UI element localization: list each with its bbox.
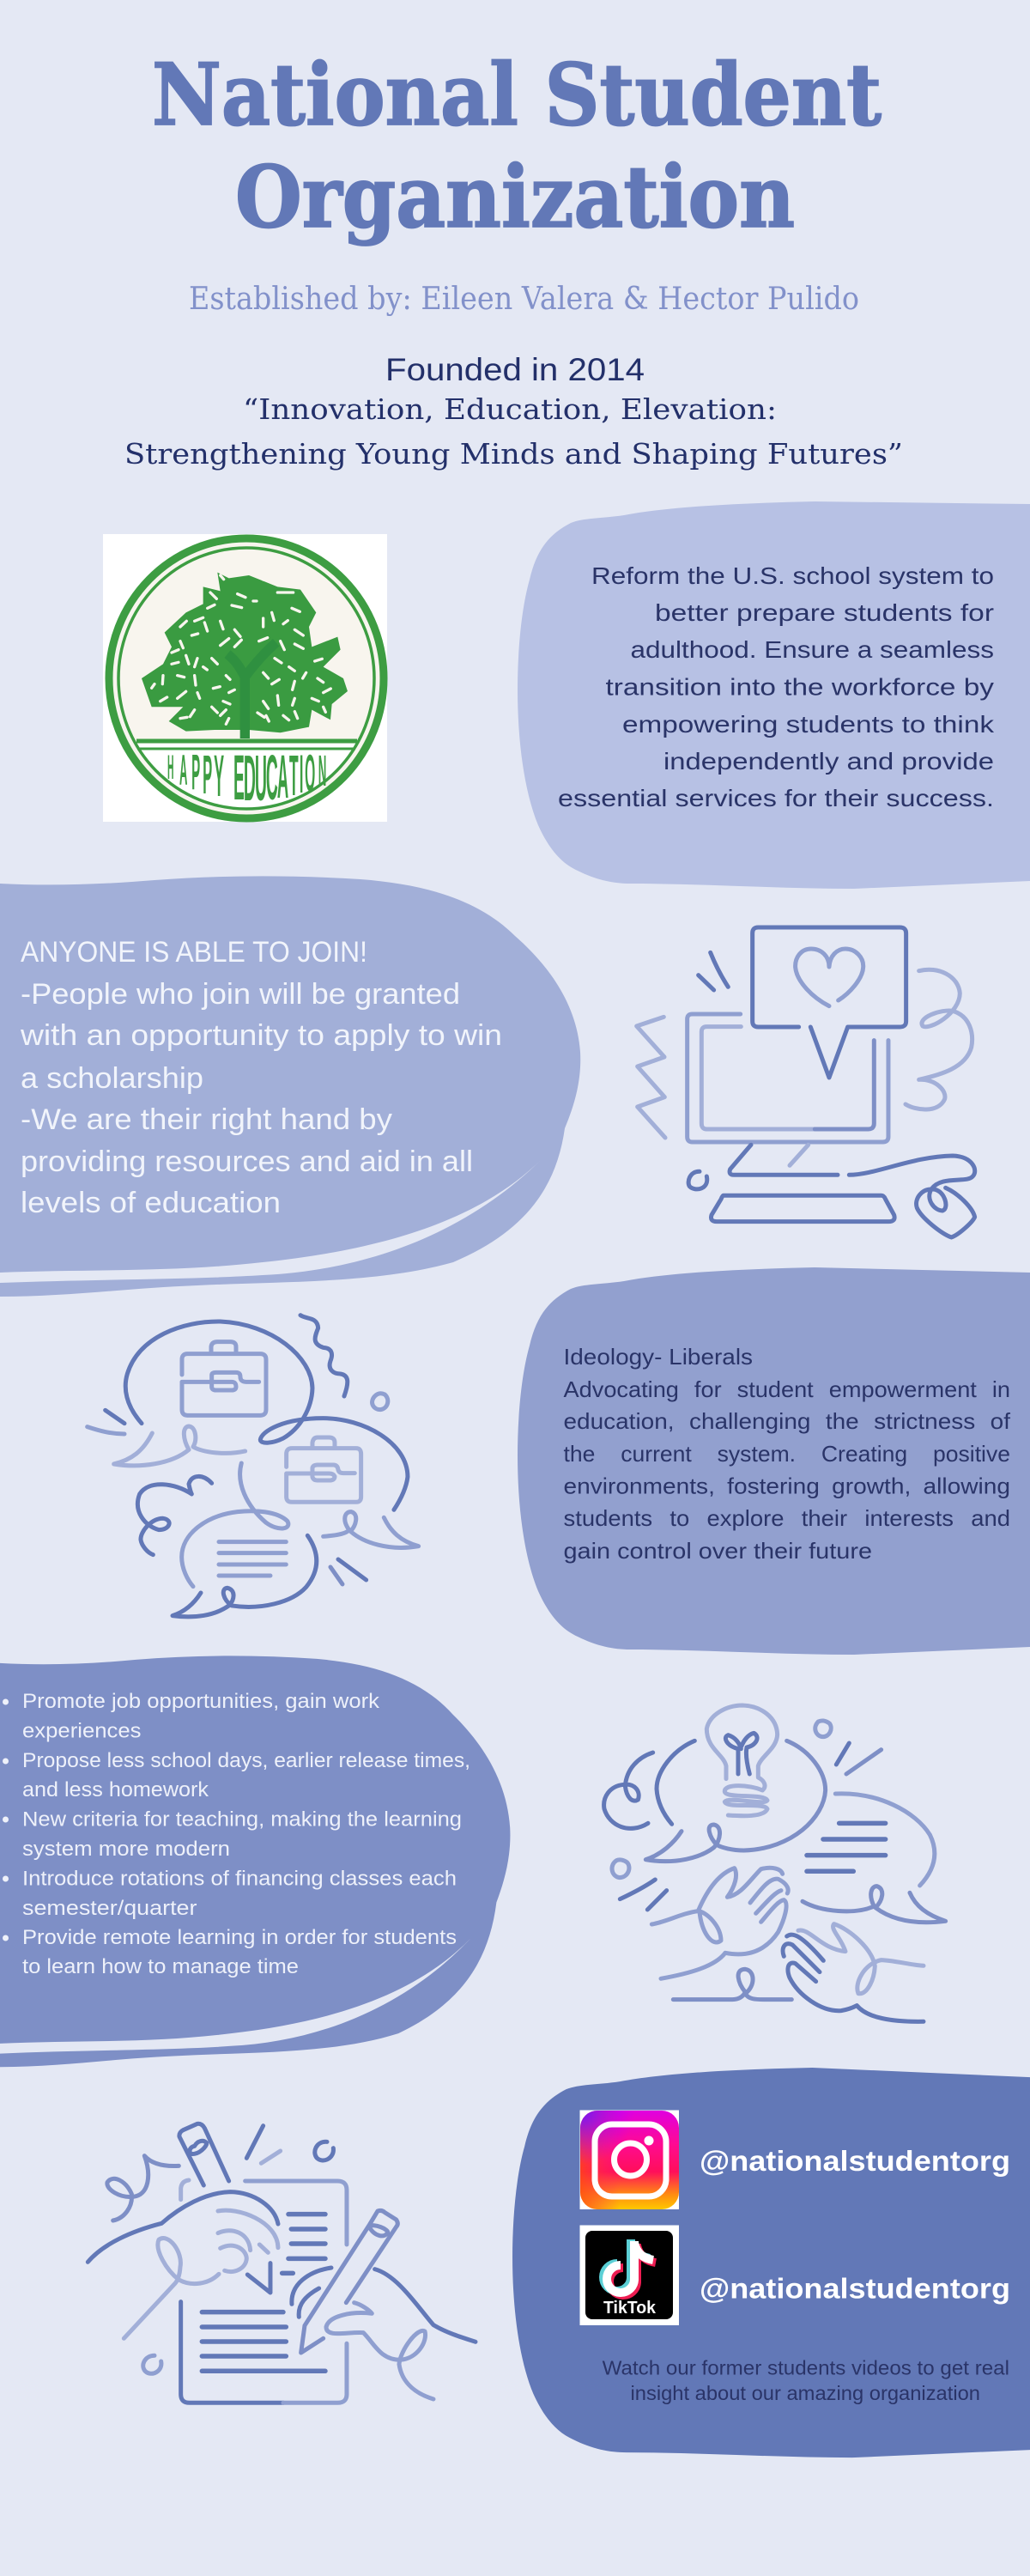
join text: with an opportunity to apply to win: [20, 1019, 502, 1052]
mission text: Reform the U.S. school system to: [591, 562, 994, 589]
join text: [20, 936, 502, 1219]
panel: ideology: [518, 1267, 1030, 1655]
panel: goals list: [0, 1656, 510, 2067]
panel: who can join: [0, 876, 580, 1297]
instagram handle: @nationalstudentorg: [700, 2145, 1010, 2177]
logo text: Y: [214, 742, 224, 809]
icon: tree: [142, 573, 348, 738]
goals text: Provide remote learning in order for students: [22, 1926, 457, 1949]
icon: instagram: [580, 2111, 679, 2209]
subtitle: founders: Established by: Eileen Valera & Hector Pulido: [189, 282, 859, 317]
join text: levels of education: [21, 1187, 281, 1219]
ideology text: Advocating for student empowerment in: [563, 1376, 1010, 1402]
logo text: U: [255, 742, 267, 814]
join text: providing resources and aid in all: [21, 1145, 473, 1178]
logo text: O: [305, 745, 315, 803]
icon: tiktok: TikTok: [603, 2299, 657, 2318]
goals text: semester/quarter: [22, 1897, 197, 1920]
ideology text: Ideology- Liberals: [563, 1344, 753, 1370]
motto: Strengthening Young Minds and Shaping Futures”: [124, 437, 903, 471]
logo text: C: [266, 743, 278, 813]
mission text: independently and provide: [663, 748, 994, 775]
logo text: N: [318, 745, 326, 795]
logo: happy education: [103, 534, 387, 822]
logo text: P: [203, 744, 212, 805]
logo text: E: [233, 743, 245, 813]
logo text: P: [191, 744, 200, 799]
logo text: I: [300, 744, 303, 805]
logo text: T: [289, 744, 299, 808]
goals text: [3, 1690, 470, 1978]
video note: insight about our amazing organization: [630, 2382, 980, 2404]
logo text: H: [167, 750, 174, 787]
mission text: [558, 562, 995, 811]
mission text: empowering students to think: [622, 711, 995, 738]
join text: ANYONE IS ABLE TO JOIN!: [21, 936, 367, 969]
goals text: to learn how to manage time: [22, 1955, 299, 1978]
title: National Student: [152, 46, 882, 145]
goals text: experiences: [22, 1720, 141, 1743]
goals text: system more modern: [22, 1838, 230, 1861]
join text: -We are their right hand by: [21, 1103, 392, 1136]
icon: light bulb and hands: [604, 1705, 946, 2021]
icon: speech bubbles with briefcases: [88, 1315, 419, 1617]
logo text: D: [244, 742, 256, 814]
join text: a scholarship: [21, 1062, 203, 1095]
ideology text: [563, 1344, 1011, 1564]
mission text: essential services for their success.: [558, 785, 994, 811]
goals text: Propose less school days, earlier release times,: [22, 1749, 470, 1772]
goals text: New criteria for teaching, making the learning: [22, 1808, 462, 1831]
ideology text: the current system. Creating positive: [563, 1441, 1010, 1467]
icon: hands writing on paper: [88, 2123, 476, 2403]
motto: [124, 392, 903, 471]
panel: social media: [512, 2068, 1030, 2458]
title: Organization: [235, 148, 795, 247]
goals text: and less homework: [22, 1778, 209, 1801]
join text: -People who join will be granted: [21, 978, 460, 1011]
ideology text: environments, fostering growth, allowing: [563, 1473, 1010, 1498]
mission text: transition into the workforce by: [606, 673, 994, 701]
video note: [603, 2356, 1009, 2404]
goals text: Introduce rotations of financing classes each: [22, 1868, 457, 1891]
ideology text: students to explore their interests and: [563, 1505, 1010, 1531]
ideology text: education, challenging the strictness of: [563, 1408, 1011, 1434]
video note: Watch our former students videos to get real: [603, 2356, 1009, 2379]
mission text: adulthood. Ensure a seamless: [630, 636, 994, 663]
ideology text: gain control over their future: [563, 1538, 872, 1564]
panel: mission: [518, 501, 1030, 889]
goals text: Promote job opportunities, gain work: [22, 1690, 380, 1713]
mission text: better prepare students for: [655, 599, 994, 626]
logo text: A: [277, 743, 288, 811]
tiktok handle: @nationalstudentorg: [700, 2273, 1010, 2305]
icon: tiktok: [580, 2226, 679, 2325]
logo text: A: [179, 746, 187, 794]
motto: “Innovation, Education, Elevation:: [243, 392, 777, 426]
founded year: Founded in 2014: [385, 352, 645, 387]
icon: computer with heart bubble: [637, 927, 975, 1237]
title: [152, 46, 882, 247]
